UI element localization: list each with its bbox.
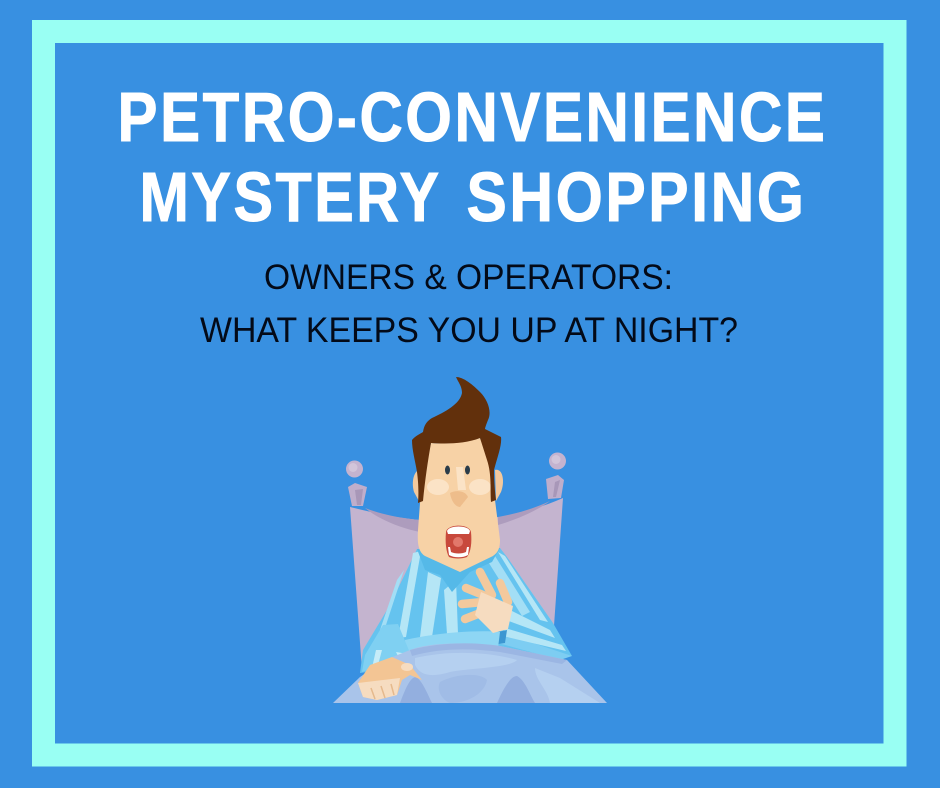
eyes: [445, 466, 470, 474]
left hand on blanket: [358, 657, 422, 700]
title: MYSTERY: [140, 158, 442, 236]
subtitle: [200, 258, 738, 350]
blanket: [333, 643, 607, 703]
title: PETRO-CONVENIENCE: [118, 78, 828, 156]
ears: [413, 470, 503, 503]
title: [118, 78, 828, 236]
hair: [412, 377, 501, 503]
mouth: [446, 526, 471, 558]
title: SHOPPING: [466, 158, 806, 236]
subtitle: WHAT KEEPS YOU UP AT NIGHT?: [200, 311, 738, 350]
headboard: [346, 452, 566, 670]
right hand on chest: [462, 572, 513, 633]
face: [418, 438, 500, 572]
pajama body: [360, 548, 572, 673]
subtitle: OWNERS & OPERATORS:: [264, 258, 673, 297]
illustration: startled man in bed: [333, 377, 607, 703]
